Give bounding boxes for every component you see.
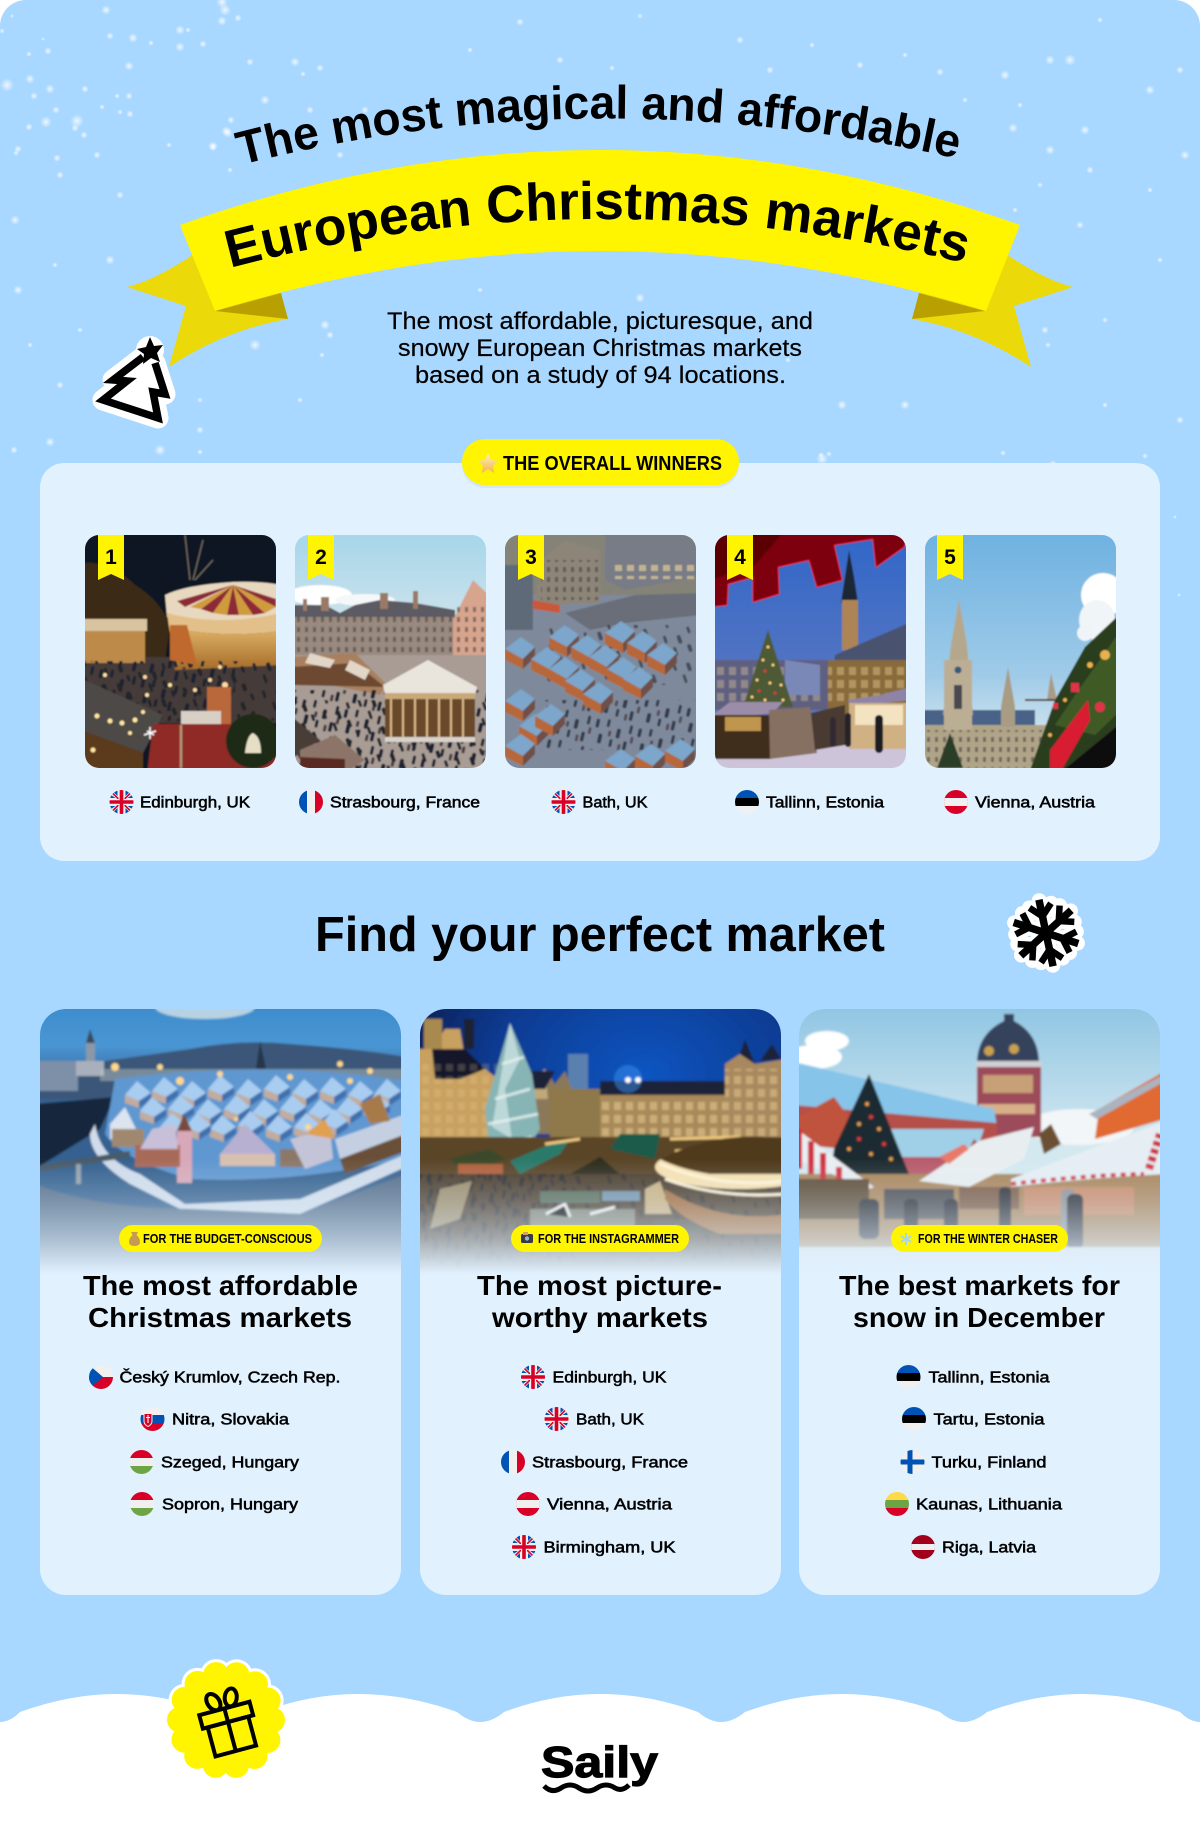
panel: most picture-worthy	[420, 1009, 781, 1595]
pill: instagrammer	[511, 1225, 689, 1252]
banner text: European Christmas markets	[224, 180, 968, 267]
rank ribbons: 4	[734, 546, 746, 569]
pill: budget-conscious: FOR THE BUDGET-CONSCIOUS	[143, 1232, 312, 1246]
photo 2: Strasbourg	[288, 530, 491, 773]
pill: instagrammer: FOR THE INSTAGRAMMER	[538, 1232, 679, 1246]
market list: Bath, UK	[576, 1412, 644, 1428]
snow ground	[0, 1694, 1200, 1833]
market list: Nitra, Slovakia	[172, 1412, 289, 1428]
pill: budget-conscious	[119, 1225, 322, 1252]
photo: Riga	[799, 1009, 1160, 1248]
winner labels: Tallinn, Estonia	[766, 794, 884, 812]
market list: Birmingham, UK	[544, 1540, 676, 1556]
title line: The most magical and affordable	[234, 84, 958, 162]
icon: snowflake sticker	[1010, 894, 1082, 972]
photo 1: Edinburgh	[80, 530, 281, 773]
rank ribbons: 3	[525, 546, 537, 569]
panel: most affordable	[35, 995, 406, 1595]
left fold	[215, 293, 288, 319]
photo: Český Krumlov	[40, 1009, 401, 1268]
market list: Riga, Latvia	[942, 1540, 1036, 1556]
pill: the overall winners	[462, 439, 739, 488]
pill: winter chaser: FOR THE WINTER CHASER	[918, 1232, 1058, 1246]
rank ribbons	[98, 535, 963, 580]
rank ribbons: 2	[315, 546, 327, 569]
market list: Tartu, Estonia	[934, 1412, 1045, 1428]
card title: The most picture-	[477, 1270, 722, 1301]
card title: The best markets for	[839, 1270, 1120, 1301]
market list: Kaunas, Lithuania	[916, 1496, 1062, 1514]
market list: Vienna, Austria	[547, 1496, 672, 1514]
panel: overall winners	[40, 439, 1160, 861]
photo 4: Tallinn	[710, 530, 911, 773]
market list	[885, 1365, 1062, 1559]
photo 5: Vienna	[925, 535, 1116, 768]
icon: snowflake	[901, 1233, 911, 1245]
icon: christmas tree sticker	[103, 336, 165, 418]
market list: Edinburgh, UK	[552, 1370, 667, 1386]
winner labels: Edinburgh, UK	[140, 794, 250, 812]
panel: best for snow	[786, 1004, 1165, 1595]
card title	[477, 1270, 722, 1333]
market list	[501, 1365, 688, 1559]
ribbon body	[180, 150, 1020, 311]
logo: Saily: Saily	[541, 1738, 659, 1787]
card title: snow in December	[853, 1302, 1105, 1333]
photo 3: Bath	[505, 535, 696, 768]
rank ribbons: 5	[944, 546, 956, 569]
winner labels: Vienna, Austria	[975, 794, 1095, 812]
card title	[839, 1270, 1120, 1333]
market list: Strasbourg, France	[532, 1454, 688, 1472]
pill: winter chaser	[891, 1225, 1068, 1252]
winner labels	[110, 790, 1095, 814]
market list: Turku, Finland	[932, 1454, 1046, 1472]
right ribbon tail	[912, 255, 1073, 367]
banner	[127, 150, 1073, 367]
icon: star	[478, 453, 498, 473]
rank ribbons: 1	[105, 546, 117, 569]
market list: Český Krumlov, Czech Rep.	[120, 1368, 340, 1386]
card title: worthy markets	[491, 1302, 708, 1333]
left ribbon tail	[127, 255, 288, 367]
subtitle: snowy European Christmas markets	[398, 335, 802, 362]
snowfall	[0, 0, 1190, 597]
subtitle	[387, 308, 813, 389]
right fold	[912, 293, 985, 319]
subtitle: The most affordable, picturesque, and	[387, 308, 813, 335]
pill: the overall winners: THE OVERALL WINNERS	[503, 453, 722, 475]
icon: gift badge	[180, 1674, 272, 1766]
card title	[83, 1270, 358, 1333]
market list	[89, 1365, 340, 1516]
heading: find your perfect market: Find your perfect market	[315, 908, 885, 962]
subtitle: based on a study of 94 locations.	[415, 362, 786, 389]
photo: Frankfurt	[420, 1009, 781, 1270]
winner labels: Strasbourg, France	[330, 794, 480, 812]
card title: Christmas markets	[88, 1302, 352, 1333]
icon: camera	[521, 1232, 533, 1243]
market list: Tallinn, Estonia	[928, 1370, 1050, 1386]
icon: money bag	[129, 1232, 140, 1246]
market list: Szeged, Hungary	[161, 1454, 299, 1472]
market list: Sopron, Hungary	[162, 1496, 298, 1514]
card title: The most affordable	[83, 1270, 358, 1301]
winner labels: Bath, UK	[582, 794, 648, 812]
